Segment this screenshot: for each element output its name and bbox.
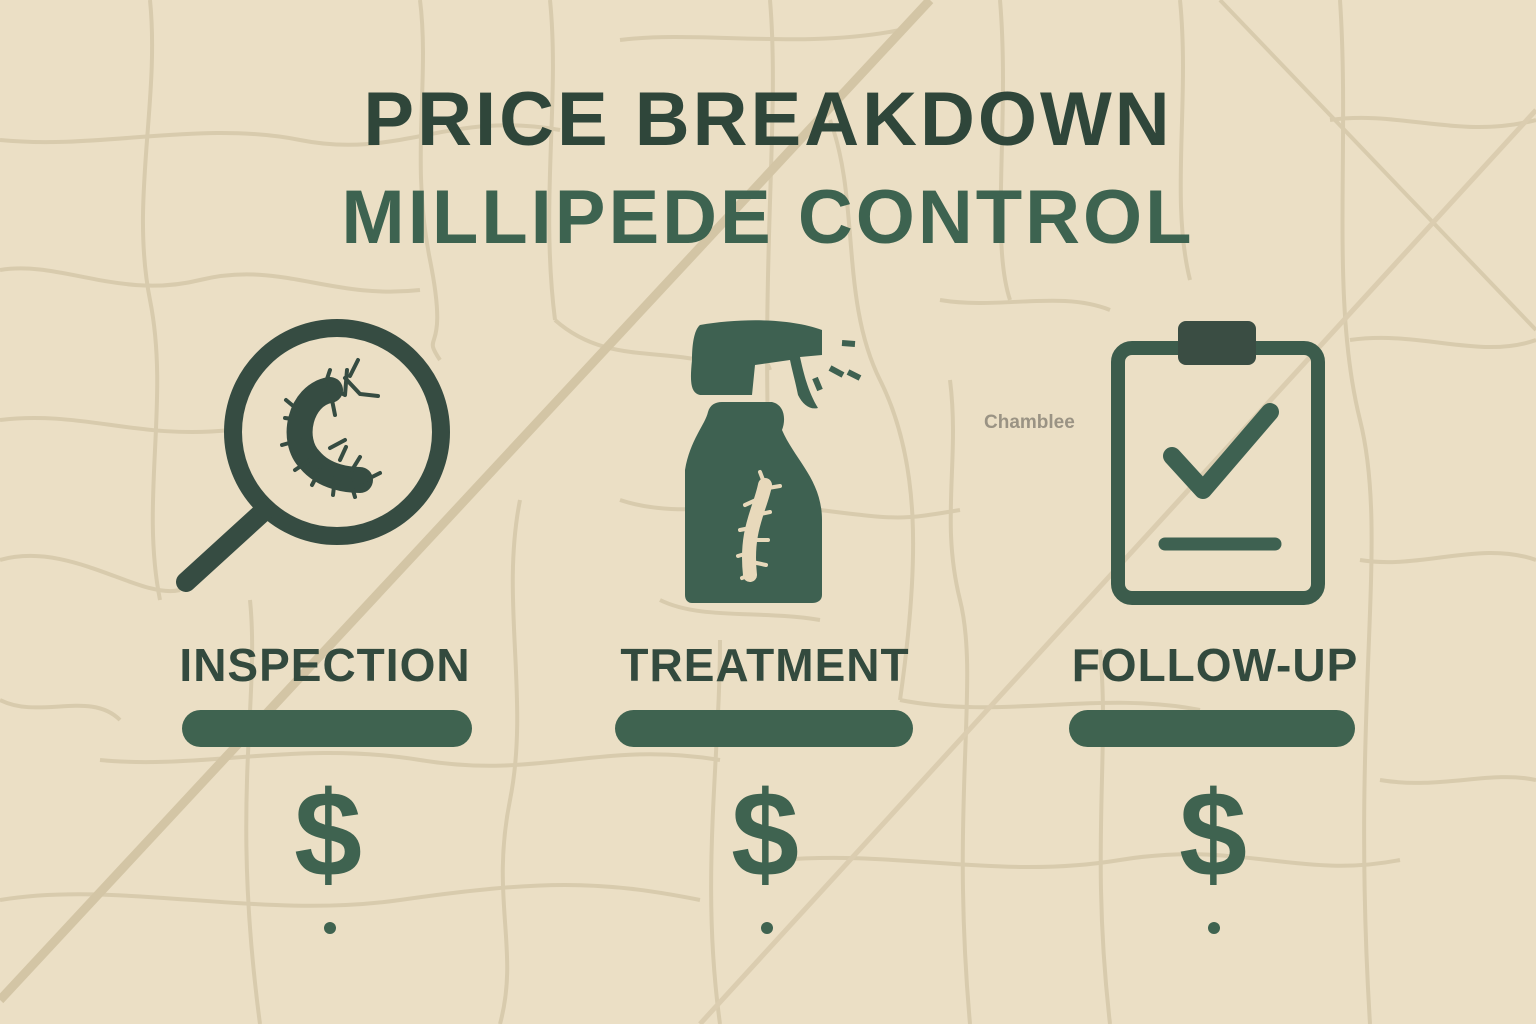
column: treatment: $ — [731, 766, 799, 902]
column: inspection: $ — [294, 766, 362, 902]
icon: spray bottle — [685, 320, 862, 603]
title: PRICE BREAKDOWN — [363, 77, 1173, 162]
map label: Chamblee: Chamblee — [984, 412, 1075, 433]
column: inspection: INSPECTION — [179, 639, 471, 691]
column: treatment: TREATMENT — [620, 639, 910, 691]
column: treatment — [615, 639, 913, 934]
icon: magnifier with millipede — [176, 319, 450, 592]
column: follow-up: $ — [1179, 766, 1247, 902]
column: follow-up: FOLLOW-UP — [1072, 639, 1358, 691]
title — [341, 77, 1195, 260]
icon: clipboard with check — [1111, 321, 1325, 605]
title: MILLIPEDE CONTROL — [341, 175, 1195, 260]
column: inspection — [179, 639, 472, 934]
column: follow-up — [1069, 639, 1358, 934]
